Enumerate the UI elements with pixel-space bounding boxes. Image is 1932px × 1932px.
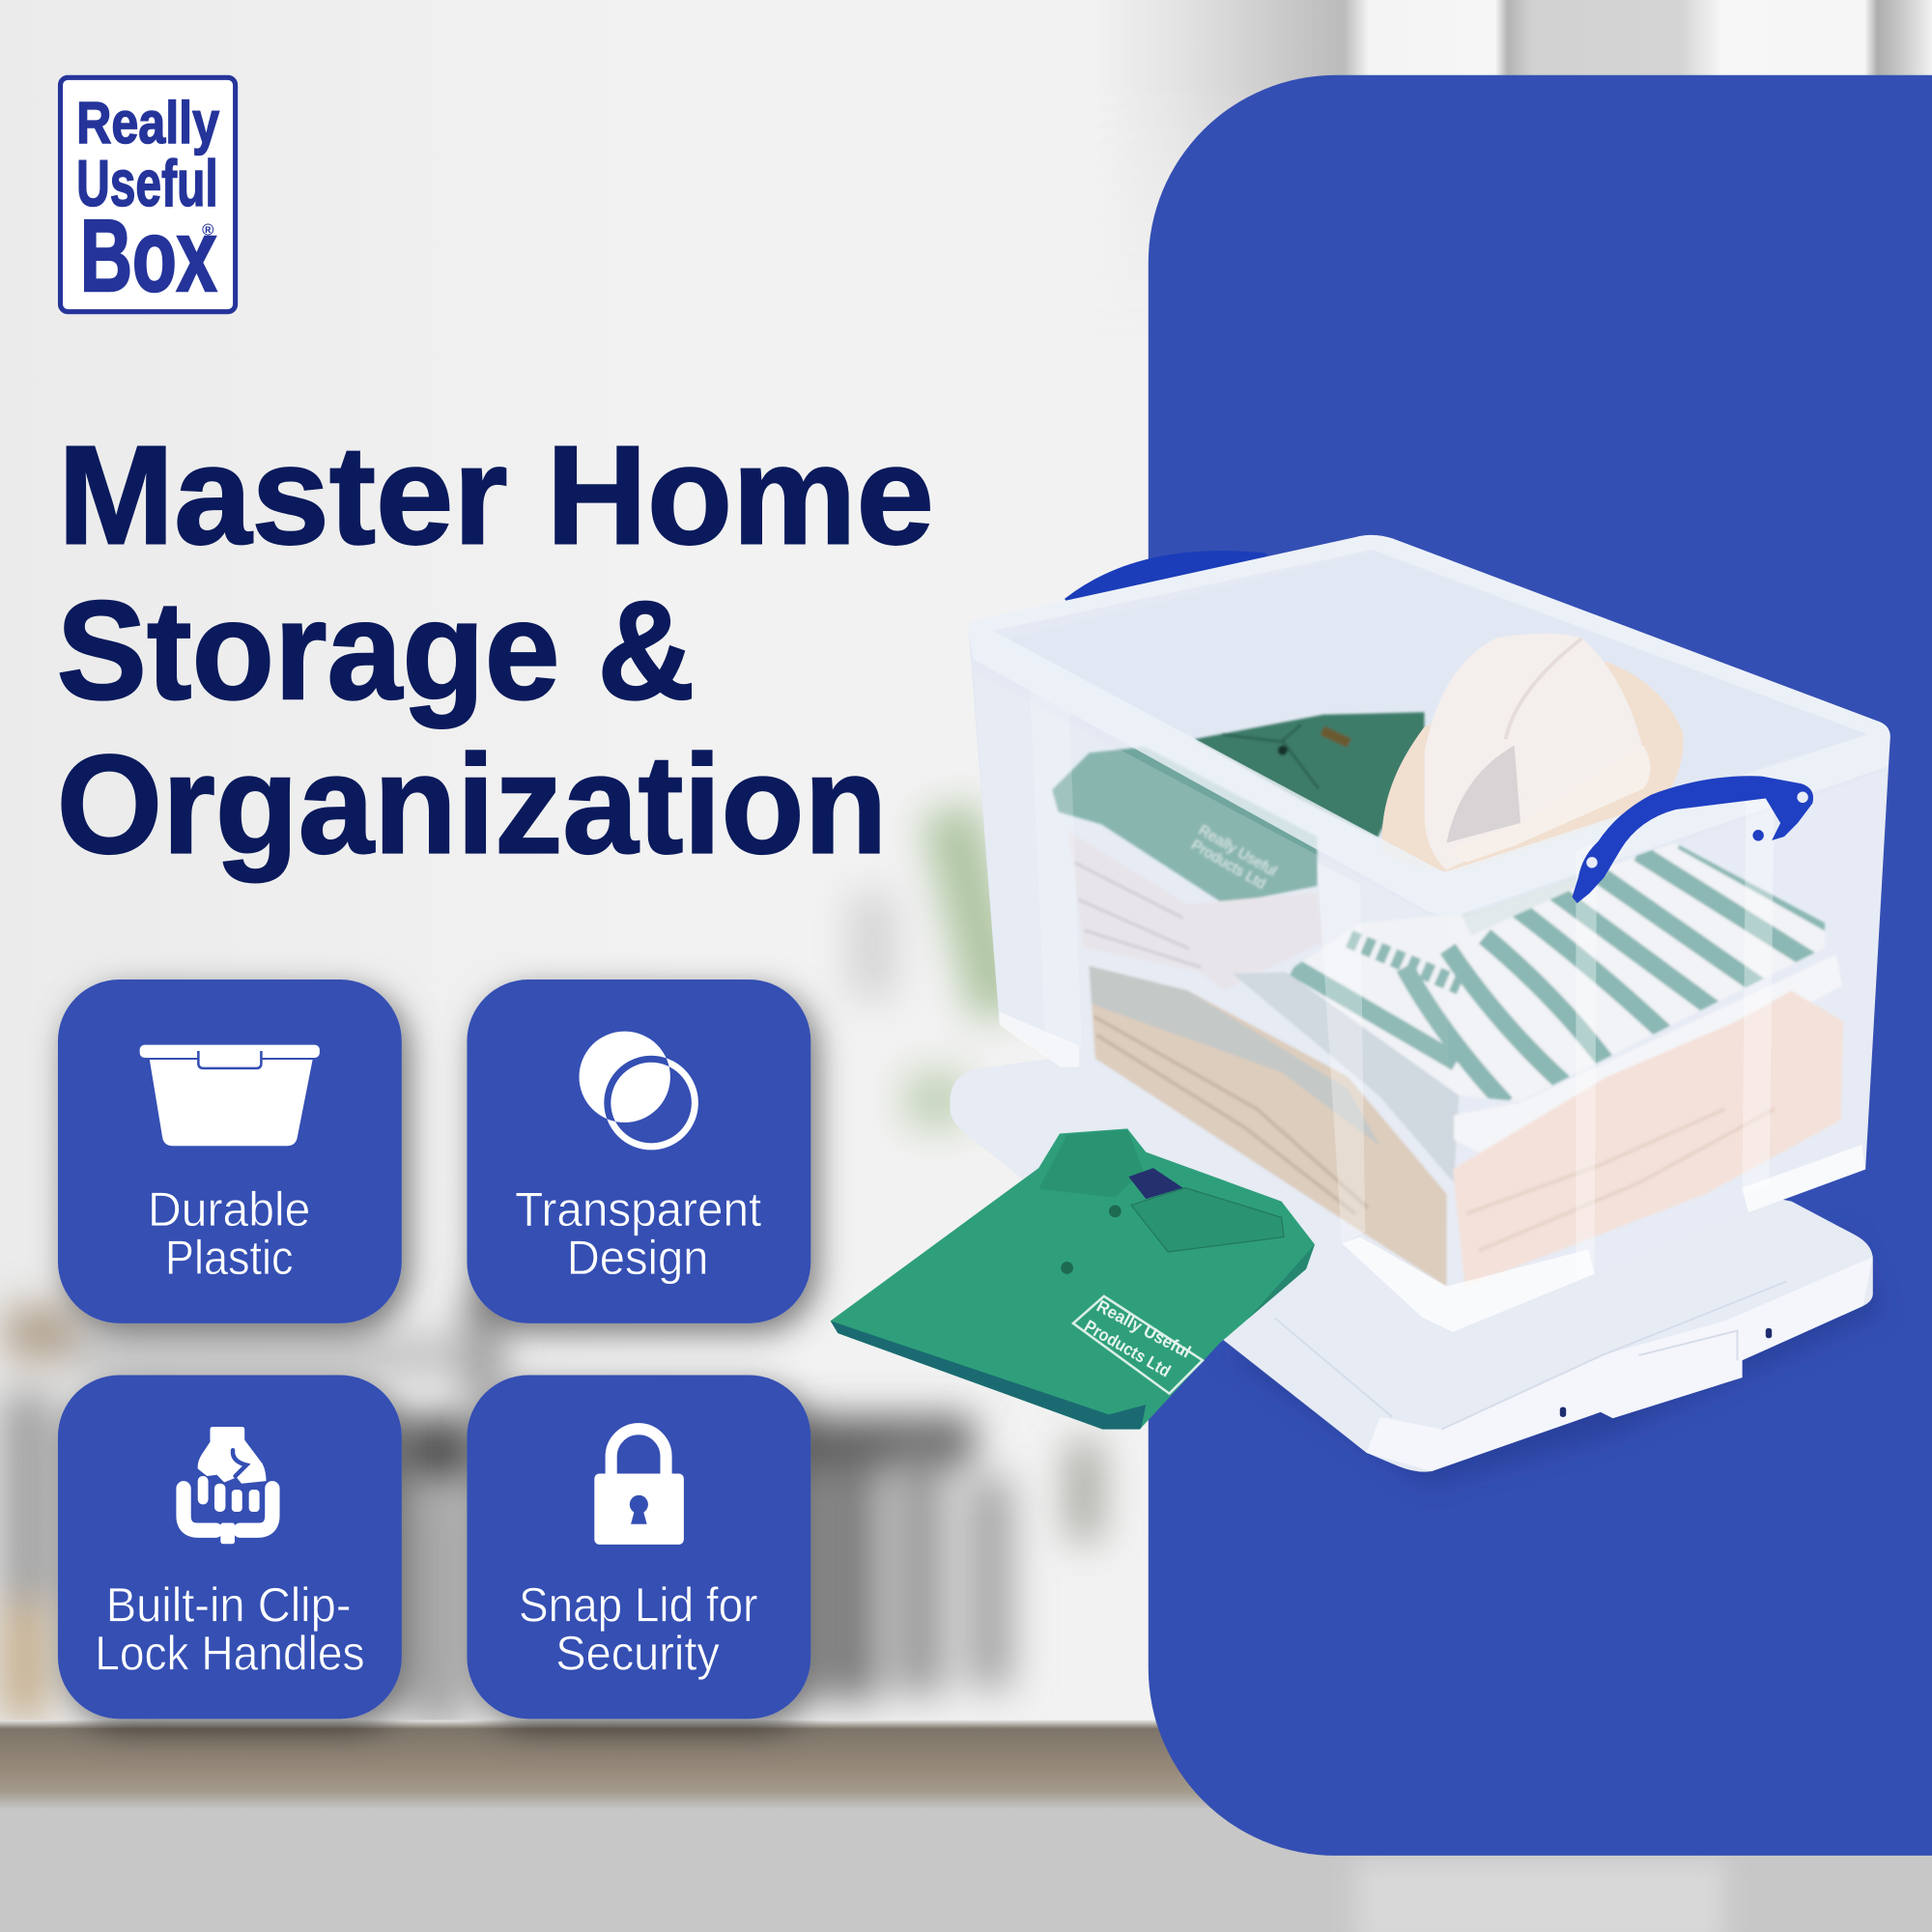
peach clothes stack right — [1453, 991, 1843, 1287]
back handle — [1065, 551, 1266, 609]
neck label — [1128, 1168, 1182, 1199]
peach clothes stack left — [1090, 966, 1446, 1287]
card: clip-lock handles: Lock Handles — [95, 1626, 365, 1680]
icon: padlock — [594, 1429, 684, 1545]
logo: ® — [202, 221, 213, 240]
shirt logo — [1073, 1296, 1203, 1394]
title: Master Home — [58, 415, 934, 573]
box body — [969, 535, 1890, 1332]
blue panel — [1149, 75, 1932, 1856]
lid shadow — [1222, 1233, 1883, 1486]
card: snap lid — [467, 1375, 810, 1719]
card: clip-lock handles — [58, 1375, 402, 1719]
shirt logo: Really Useful — [1094, 1296, 1194, 1362]
card: transparent design: Design — [567, 1231, 708, 1285]
clothes seen through the box — [1052, 712, 1843, 1287]
title: Storage & — [57, 571, 695, 728]
title — [57, 415, 934, 883]
icon: overlapping circles — [579, 1032, 695, 1147]
white fold under stripes — [1454, 955, 1842, 1164]
logo — [60, 77, 236, 313]
icon: storage box — [140, 1045, 320, 1146]
frosted glass front faces — [974, 671, 1453, 1332]
teal folded shirt: Products Ltd — [1188, 837, 1268, 893]
icon: hand gripping handle — [184, 1427, 272, 1544]
hat — [1382, 634, 1684, 872]
teal folded shirt: Really Useful — [1196, 822, 1279, 880]
dark green polo in box — [1194, 712, 1424, 838]
back wall tint — [998, 552, 1868, 863]
card: durable plastic: Durable — [148, 1182, 310, 1236]
rim — [969, 535, 1890, 916]
card: durable plastic — [58, 980, 402, 1323]
near handle — [1573, 776, 1813, 903]
white folded clothes — [1067, 831, 1323, 991]
card: durable plastic: Plastic — [165, 1231, 294, 1285]
collar — [1038, 1130, 1144, 1198]
green polo shirt — [831, 1128, 1319, 1435]
lid — [950, 1057, 1873, 1472]
product: storage box with lid and clothes — [831, 535, 1890, 1486]
title: Organization — [57, 725, 887, 883]
striped shirt — [1287, 840, 1836, 1104]
teal folded shirt — [1052, 747, 1318, 904]
shirt logo: Products Ltd — [1081, 1316, 1174, 1380]
card: snap lid: Security — [555, 1626, 720, 1680]
logo: Really — [76, 90, 219, 156]
logo: Useful — [76, 148, 218, 220]
card: snap lid: Snap Lid for — [519, 1578, 757, 1633]
ribs and feet — [999, 690, 1865, 1332]
card: clip-lock handles: Built-in Clip- — [106, 1578, 352, 1633]
grey-blue folded shirt — [1233, 972, 1459, 1182]
logo: Box — [80, 199, 217, 313]
card: transparent design — [467, 980, 810, 1323]
card: transparent design: Transparent — [515, 1182, 761, 1236]
